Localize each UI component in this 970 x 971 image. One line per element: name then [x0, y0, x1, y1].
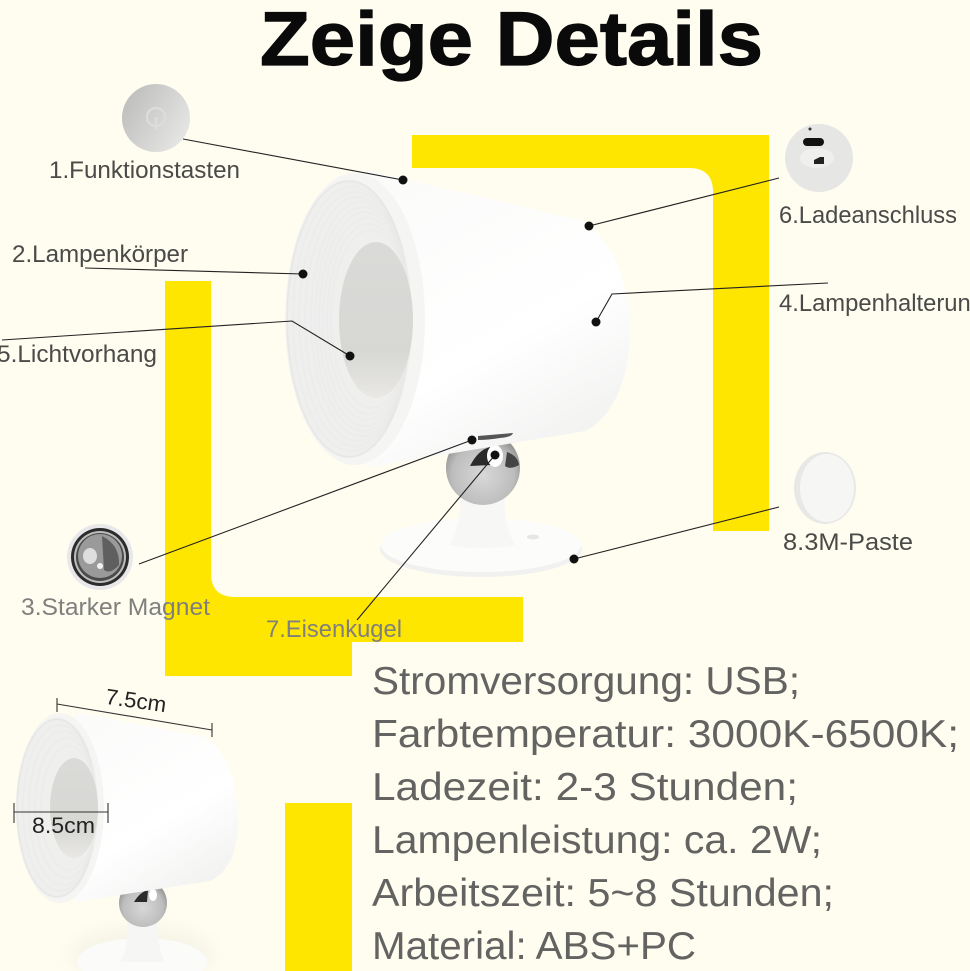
main lamp — [285, 170, 630, 577]
part labels: 6.Ladeanschluss — [779, 202, 957, 229]
icon: function button — [122, 84, 190, 152]
chrome ball — [446, 431, 520, 505]
small lamp lens — [50, 758, 98, 858]
specifications: Lampenleistung: ca. 2W; — [372, 819, 822, 862]
icon: charging port — [785, 124, 853, 192]
part labels: 5.Lichtvorhang — [0, 341, 157, 368]
part labels: 3.Starker Magnet — [21, 594, 210, 621]
part labels: 1.Funktionstasten — [49, 157, 240, 184]
specifications: Material: ABS+PC — [372, 925, 696, 968]
lamp body — [365, 170, 630, 467]
dimension: 7.5cm: 7.5cm — [104, 684, 168, 717]
part labels: 7.Eisenkugel — [266, 616, 402, 643]
base shadow — [70, 925, 214, 971]
specifications: Ladezeit: 2-3 Stunden; — [372, 766, 798, 809]
small lamp ribs — [17, 719, 97, 897]
dimension: 8.5cm: 8.5cm — [32, 813, 95, 838]
yellow block: bottom — [285, 803, 352, 971]
leader lines — [2, 139, 828, 620]
small chrome ball — [119, 879, 167, 927]
lamp stand — [380, 495, 582, 577]
yellow frame: top right — [412, 135, 769, 531]
lamp face rim — [285, 173, 425, 465]
part labels — [0, 157, 970, 643]
small lamp face — [16, 713, 104, 903]
small lamp stand — [77, 915, 207, 971]
icon: 3M paste — [794, 452, 856, 524]
specifications: Stromversorgung: USB; — [372, 660, 800, 703]
small lamp body — [75, 712, 238, 902]
dimension: 8.5cm — [14, 803, 108, 838]
small lamp — [16, 712, 238, 971]
lamp face ribs — [287, 181, 411, 457]
part labels: 8.3M-Paste — [783, 529, 913, 556]
specifications: Farbtemperatur: 3000K-6500K; — [372, 713, 959, 756]
part labels: 2.Lampenkörper — [12, 241, 188, 268]
lamp lens — [339, 242, 413, 398]
icon: magnet — [67, 524, 133, 590]
specifications — [372, 660, 959, 968]
lamp underside shadow — [478, 433, 513, 440]
dimension: 7.5cm — [57, 684, 212, 737]
leader dots — [298, 176, 600, 564]
specifications: Arbeitszeit: 5~8 Stunden; — [372, 872, 834, 915]
yellow frame: bottom left — [165, 281, 523, 676]
